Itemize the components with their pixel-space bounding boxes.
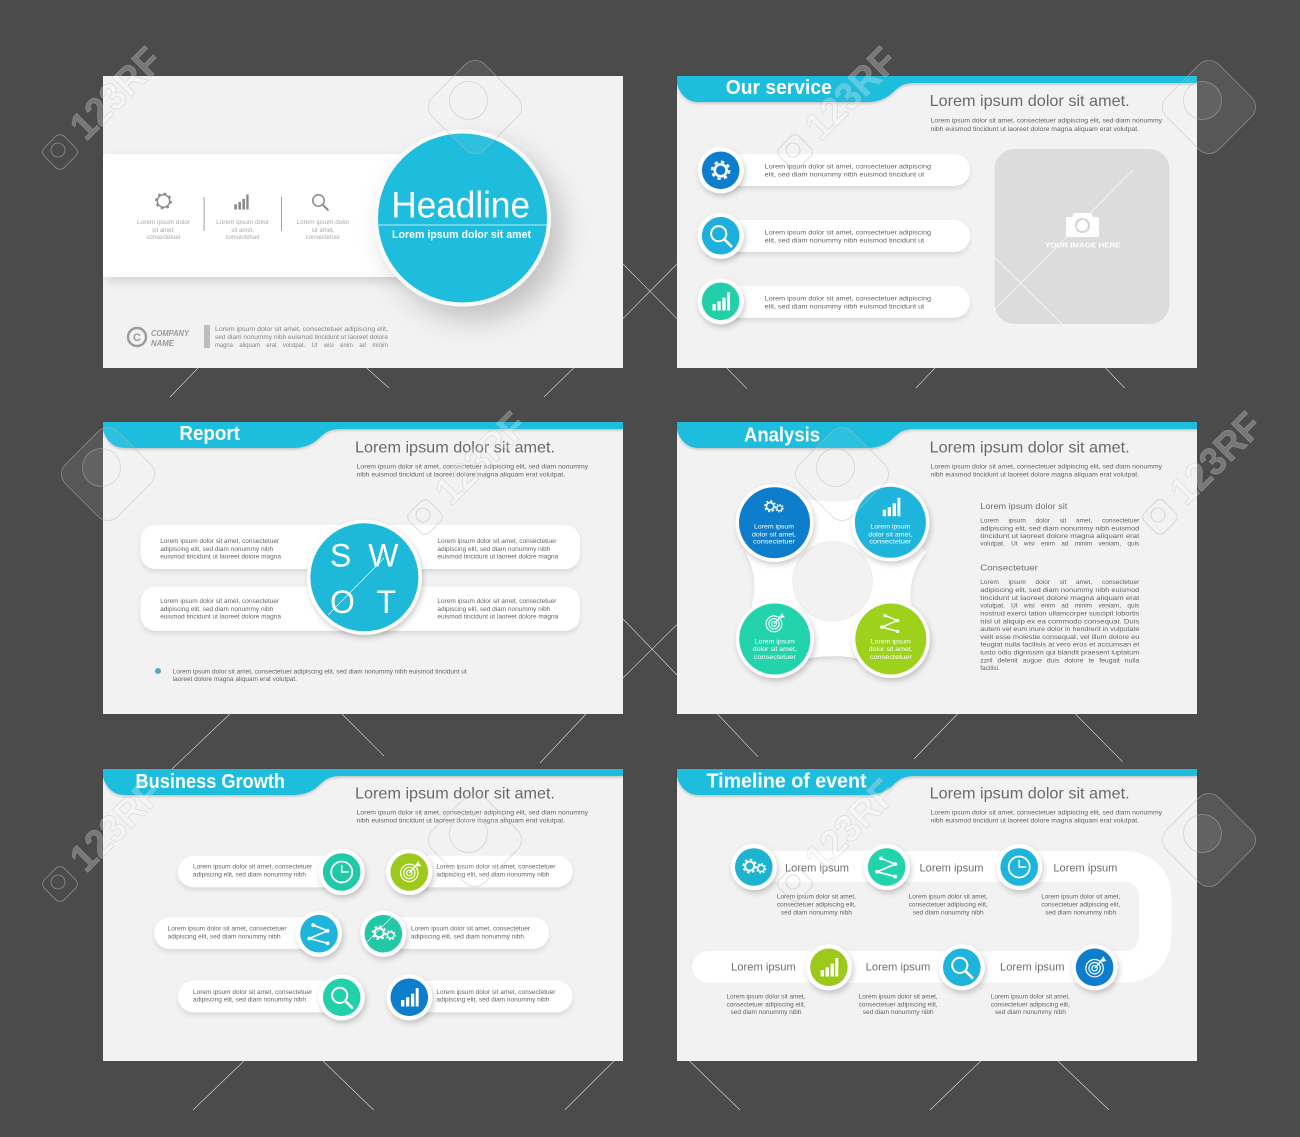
circle: target bbox=[736, 600, 814, 678]
service row 3 bbox=[698, 278, 970, 324]
intro text bbox=[357, 464, 589, 479]
headline circle bbox=[374, 130, 551, 306]
timeline track bbox=[692, 851, 1171, 983]
circle: share: dolor sit amet, bbox=[869, 646, 913, 653]
icon: bars bbox=[234, 194, 249, 210]
growth item: clock bbox=[178, 849, 365, 895]
circle: gears: consectetuer bbox=[753, 539, 796, 546]
panel: timeline slide bbox=[677, 769, 1197, 1061]
growth item: search: Lorem ipsum dolor sit amet, consectetuer bbox=[193, 989, 313, 996]
swot bottom-right text: Lorem ipsum dolor sit amet, consectetuer bbox=[437, 598, 557, 605]
panel: report slide bbox=[103, 422, 623, 714]
swot bottom-left text: adipiscing elit, sed diam nonummy nibh bbox=[160, 606, 274, 613]
watermark: thin line segments bbox=[170, 170, 1133, 1110]
bullet note: laoreet dolore magna aliquam erat volutpat. bbox=[173, 676, 297, 683]
bars caption: consectetuer bbox=[226, 235, 260, 241]
bullet note bbox=[173, 668, 467, 683]
bullet dot bbox=[155, 668, 161, 674]
event 2: Lorem ipsum bbox=[920, 862, 984, 874]
swot circle bbox=[307, 520, 422, 635]
intro text: Lorem ipsum dolor sit amet, consectetuer adipiscing elit, sed diam nonummy bbox=[931, 810, 1163, 817]
growth item: target: adipiscing elit, sed diam nonummy nibh bbox=[436, 872, 550, 879]
circle: target: consectetuer bbox=[754, 654, 797, 661]
watermark: stock logo outlines: 123RF bbox=[797, 39, 906, 148]
event 5: Lorem ipsum bbox=[866, 961, 930, 973]
event 4: sed diam nonummy nibh bbox=[730, 1009, 802, 1016]
swot circle: O bbox=[330, 584, 355, 620]
circle: gears: Lorem ipsum bbox=[754, 523, 795, 530]
text block: lorem: adipiscing elit, sed diam nonummy nibh euismod bbox=[980, 525, 1140, 532]
swot top-left text: euismod tincidunt ut laoreet dolore magna bbox=[160, 554, 281, 561]
watermark: small camera outlines bbox=[40, 132, 1180, 904]
swot bottom-left text: Lorem ipsum dolor sit amet, consectetuer bbox=[160, 598, 280, 605]
growth item: gears: Lorem ipsum dolor sit amet, consectetuer bbox=[411, 925, 531, 932]
circle: gears: dolor sit amet, bbox=[752, 531, 796, 538]
footer text: sed diam nonummy nibh euismod tincidunt ut laoreet dolore bbox=[215, 335, 389, 341]
text block: consectetuer bbox=[980, 563, 1140, 672]
image placeholder bbox=[994, 149, 1170, 324]
intro text: nibh euismod tincidunt ut laoreet dolore magna aliquam erat volutpat. bbox=[357, 472, 565, 479]
intro text: Lorem ipsum dolor sit amet, consectetuer adipiscing elit, sed diam nonummy bbox=[357, 810, 589, 817]
event 2 bbox=[864, 844, 988, 916]
growth item: gears bbox=[360, 911, 549, 957]
footer text: magna aliquam erat volutpat. Ut wisi enim ad minim bbox=[215, 343, 388, 349]
white band bbox=[103, 154, 443, 277]
header tab bbox=[103, 769, 623, 795]
text block: consectetuer: velit esse molestie consequat, vel illum dolore eu bbox=[980, 634, 1140, 641]
magnifier caption bbox=[296, 220, 350, 241]
circle: bars bbox=[851, 483, 929, 561]
text block: lorem: Lorem ipsum dolor sit bbox=[980, 501, 1068, 511]
gear caption: sit amet, bbox=[152, 228, 175, 234]
footer bar bbox=[204, 325, 210, 348]
swot top-right text: Lorem ipsum dolor sit amet, consectetuer bbox=[437, 538, 557, 545]
event 1: sed diam nonummy nibh bbox=[781, 909, 852, 916]
icon: camera bbox=[1066, 213, 1099, 237]
event 5: consectetuer adipiscing elit, bbox=[859, 1001, 938, 1008]
circle: target: Lorem ipsum bbox=[755, 639, 795, 646]
circle: bars: dolor sit amet, bbox=[868, 531, 913, 538]
header tab bbox=[677, 76, 1197, 102]
event 1 bbox=[731, 844, 856, 916]
event 6 bbox=[991, 944, 1118, 1016]
service row 1: Lorem ipsum dolor sit amet, consectetuer adipiscing bbox=[765, 164, 931, 171]
swot bottom-right text: adipiscing elit, sed diam nonummy nibh bbox=[437, 606, 551, 613]
text block: consectetuer: Lorem ipsum dolor sit amet, consectetuer bbox=[980, 579, 1140, 586]
subheading: Lorem ipsum dolor sit amet. bbox=[930, 439, 1130, 456]
icon: gear bbox=[156, 194, 171, 208]
title: Our service bbox=[726, 77, 832, 99]
swot bottom-right text: euismod tincidunt ut laoreet dolore magna bbox=[437, 614, 559, 621]
watermark: large camera outlines bbox=[56, 55, 1261, 892]
event 2: sed diam nonummy nibh bbox=[913, 909, 984, 916]
event 6: Lorem ipsum bbox=[1000, 961, 1064, 973]
growth item: bars: Lorem ipsum dolor sit amet, consectetuer bbox=[436, 989, 556, 996]
service row 1: elit, sed diam nonummy nibh euismod tincidunt ut bbox=[765, 172, 924, 179]
header tab bbox=[103, 422, 623, 448]
watermark: stock logo outlines: 123RF bbox=[797, 771, 906, 880]
divider bbox=[204, 197, 205, 231]
event 3 bbox=[996, 844, 1120, 916]
swot top-left text bbox=[160, 538, 281, 561]
panel: cover slide bbox=[103, 76, 623, 368]
text block: consectetuer: volutpat. Ut wisi enim ad minim veniam, quis bbox=[980, 603, 1140, 610]
growth item: search bbox=[178, 974, 365, 1020]
title: Report bbox=[179, 423, 240, 445]
growth item: gears: adipiscing elit, sed diam nonummy nibh bbox=[411, 933, 524, 940]
bars caption bbox=[216, 220, 269, 241]
company logo: C bbox=[133, 332, 141, 344]
growth item: target: Lorem ipsum dolor sit amet, consectetuer bbox=[436, 864, 556, 871]
image placeholder: YOUR IMAGE HERE bbox=[1045, 241, 1121, 250]
service row 2: Lorem ipsum dolor sit amet, consectetuer adipiscing bbox=[765, 230, 931, 237]
text block: lorem: Lorem ipsum dolor sit amet, consectetuer bbox=[980, 517, 1140, 524]
magnifier caption: Lorem ipsum dolor bbox=[296, 220, 350, 226]
four-circle diagram bbox=[736, 483, 930, 678]
event 5: sed diam nonummy nibh bbox=[863, 1009, 934, 1016]
watermark: stock logo outlines: 123RF bbox=[427, 404, 536, 513]
text block: consectetuer: iusto odio dignissim qui blandit praesent luptatum bbox=[980, 650, 1140, 657]
circle: share: Lorem ipsum bbox=[871, 639, 911, 646]
panel: our service slide bbox=[677, 76, 1197, 368]
header tab bbox=[677, 769, 1197, 795]
swot bottom-right text bbox=[437, 598, 559, 621]
intro text: nibh euismod tincidunt ut laoreet dolore magna aliquam erat volutpat. bbox=[357, 818, 565, 825]
swot top-right text bbox=[437, 538, 559, 561]
company logo bbox=[128, 328, 190, 348]
watermark: stock logo outlines: 123RF bbox=[62, 39, 171, 148]
intro text: Lorem ipsum dolor sit amet, consectetuer adipiscing elit, sed diam nonummy bbox=[357, 464, 589, 471]
event 5: Lorem ipsum dolor sit amet, bbox=[859, 993, 938, 1000]
magnifier caption: sit amet, bbox=[312, 228, 335, 234]
watermark: stock logo outlines: 123RF bbox=[62, 771, 171, 880]
text block: consectetuer: facilisi. bbox=[980, 665, 1000, 672]
text block: consectetuer: adipiscing elit, sed diam nonummy nibh euismod bbox=[980, 587, 1140, 594]
intro text: nibh euismod tincidunt ut laoreet dolore magna aliquam erat volutpat. bbox=[931, 818, 1139, 825]
subheading: Lorem ipsum dolor sit amet. bbox=[355, 439, 555, 456]
footer text: Lorem ipsum dolor sit amet, consectetuer adipiscing elit, bbox=[215, 327, 388, 333]
service row 3: elit, sed diam nonummy nibh euismod tincidunt ut bbox=[765, 303, 924, 310]
event 6: sed diam nonummy nibh bbox=[995, 1009, 1066, 1016]
text block: lorem: volutpat. Ut wisi enim ad minim veniam, quis bbox=[980, 541, 1140, 548]
growth item: clock: adipiscing elit, sed diam nonummy nibh bbox=[193, 872, 306, 879]
connector shape bbox=[745, 498, 926, 660]
text block: consectetuer: nisl ut aliquip ex ea commodo consequat. Duis bbox=[980, 618, 1140, 625]
watermark: stock logo outlines: 123RF bbox=[1162, 404, 1271, 513]
event 4 bbox=[726, 944, 852, 1016]
swot circle: T bbox=[377, 584, 396, 620]
event 6: Lorem ipsum dolor sit amet, bbox=[991, 993, 1070, 1000]
event 3: consectetuer adipiscing elit, bbox=[1041, 902, 1120, 909]
company logo: COMPANY bbox=[151, 329, 190, 338]
growth item: share: adipiscing elit, sed diam nonummy nibh bbox=[168, 933, 281, 940]
growth item: clock: Lorem ipsum dolor sit amet, consectetuer bbox=[193, 864, 313, 871]
gear caption: Lorem ipsum dolor bbox=[137, 220, 190, 226]
service row 3: Lorem ipsum dolor sit amet, consectetuer adipiscing bbox=[765, 295, 931, 302]
circle: gears bbox=[736, 484, 814, 562]
intro text bbox=[931, 464, 1163, 479]
company logo: NAME bbox=[151, 339, 175, 348]
event 1: Lorem ipsum bbox=[785, 862, 849, 874]
gear caption: consectetuer bbox=[146, 235, 181, 241]
swot bottom-left text bbox=[160, 598, 281, 621]
growth item: bars bbox=[386, 974, 573, 1020]
growth item: target bbox=[386, 849, 573, 895]
event 4: Lorem ipsum dolor sit amet, bbox=[726, 993, 806, 1000]
growth item: share: Lorem ipsum dolor sit amet, consectetuer bbox=[168, 925, 287, 932]
service row 1 bbox=[698, 147, 970, 193]
panel: analysis slide bbox=[677, 422, 1197, 714]
bars caption: Lorem ipsum dolor bbox=[216, 220, 269, 226]
event 3: sed diam nonummy nibh bbox=[1045, 909, 1117, 916]
circle: share bbox=[852, 600, 930, 678]
swot bottom-left text: euismod tincidunt ut laoreet dolore magna bbox=[160, 614, 281, 621]
circle: share: consectetuer bbox=[870, 654, 913, 661]
text block: consectetuer: zzril delenit augue duis dolore te feugait nulla bbox=[980, 657, 1140, 664]
text block: consectetuer: feugiat nulla facilisis at vero eros et accumsan et bbox=[980, 642, 1139, 649]
bars caption: sit amet, bbox=[231, 228, 254, 234]
event 4: consectetuer adipiscing elit, bbox=[726, 1001, 806, 1008]
panel: business growth slide bbox=[103, 769, 623, 1061]
event 1: consectetuer adipiscing elit, bbox=[777, 902, 856, 909]
text block: consectetuer: nostrud exerci tation ullamcorper suscipit lobortis bbox=[980, 611, 1140, 618]
circle: bars: Lorem ipsum bbox=[870, 523, 911, 530]
event 3: Lorem ipsum dolor sit amet, bbox=[1041, 894, 1120, 901]
magnifier caption: consectetuer bbox=[306, 235, 340, 241]
swot top-right text: adipiscing elit, sed diam nonummy nibh bbox=[437, 546, 551, 553]
growth item: bars: adipiscing elit, sed diam nonummy nibh bbox=[436, 997, 550, 1004]
divider bbox=[281, 197, 282, 231]
footer text bbox=[215, 327, 389, 349]
intro text: Lorem ipsum dolor sit amet, consectetuer adipiscing elit, sed diam nonummy bbox=[931, 464, 1163, 471]
intro text bbox=[357, 810, 589, 825]
circle: bars: consectetuer bbox=[869, 539, 912, 546]
event 6: consectetuer adipiscing elit, bbox=[991, 1001, 1070, 1008]
circle: target: dolor sit amet, bbox=[753, 646, 797, 653]
swot circle: W bbox=[368, 538, 399, 574]
title: Business Growth bbox=[136, 771, 285, 793]
title: Timeline of event bbox=[706, 770, 867, 792]
gear caption bbox=[137, 220, 190, 241]
event 5 bbox=[859, 944, 985, 1016]
text block: lorem bbox=[980, 501, 1140, 548]
swot rows bbox=[141, 525, 580, 631]
icon: magnifier bbox=[313, 195, 328, 210]
watermark: stock logo outlines bbox=[62, 39, 1271, 880]
headline subtitle: Lorem ipsum dolor sit amet bbox=[392, 229, 531, 241]
swot top-left text: adipiscing elit, sed diam nonummy nibh bbox=[160, 546, 274, 553]
event 4: Lorem ipsum bbox=[731, 961, 796, 973]
intro text bbox=[931, 810, 1163, 825]
event 3: Lorem ipsum bbox=[1053, 862, 1117, 874]
swot top-right text: euismod tincidunt ut laoreet dolore magna bbox=[437, 554, 559, 561]
swot top-left text: Lorem ipsum dolor sit amet, consectetuer bbox=[160, 538, 280, 545]
service row 2 bbox=[698, 213, 970, 259]
subheading: Lorem ipsum dolor sit amet. bbox=[930, 786, 1130, 803]
swot circle: S bbox=[330, 538, 351, 574]
subheading: Lorem ipsum dolor sit amet. bbox=[930, 93, 1130, 110]
growth item: search: adipiscing elit, sed diam nonummy nibh bbox=[193, 997, 306, 1004]
growth item: share bbox=[154, 911, 342, 957]
intro text: Lorem ipsum dolor sit amet, consectetuer adipiscing elit, sed diam nonummy bbox=[931, 118, 1163, 125]
service row 2: elit, sed diam nonummy nibh euismod tincidunt ut bbox=[765, 238, 924, 245]
intro text: nibh euismod tincidunt ut laoreet dolore magna aliquam erat volutpat. bbox=[931, 126, 1139, 133]
intro text bbox=[931, 118, 1163, 133]
event 1: Lorem ipsum dolor sit amet, bbox=[777, 894, 856, 901]
event 2: Lorem ipsum dolor sit amet, bbox=[909, 894, 988, 901]
headline: Headline bbox=[391, 184, 530, 226]
header tab bbox=[677, 422, 1197, 448]
text block: lorem: tincidunt ut laoreet dolore magna aliquam erat bbox=[980, 533, 1139, 540]
title: Analysis bbox=[744, 425, 820, 447]
text block: consectetuer: tincidunt ut laoreet dolore magna aliquam erat bbox=[980, 595, 1139, 602]
bullet note: Lorem ipsum dolor sit amet, consectetuer adipiscing elit, sed diam nonummy nibh euismod tincidunt ut bbox=[173, 668, 467, 675]
text block: consectetuer: Consectetuer bbox=[980, 563, 1038, 573]
intro text: nibh euismod tincidunt ut laoreet dolore magna aliquam erat volutpat. bbox=[931, 472, 1139, 479]
event 2: consectetuer adipiscing elit, bbox=[909, 902, 988, 909]
text block: consectetuer: autem vel eum iriure dolor in hendrerit in vulputate bbox=[980, 626, 1140, 633]
subheading: Lorem ipsum dolor sit amet. bbox=[355, 786, 555, 803]
